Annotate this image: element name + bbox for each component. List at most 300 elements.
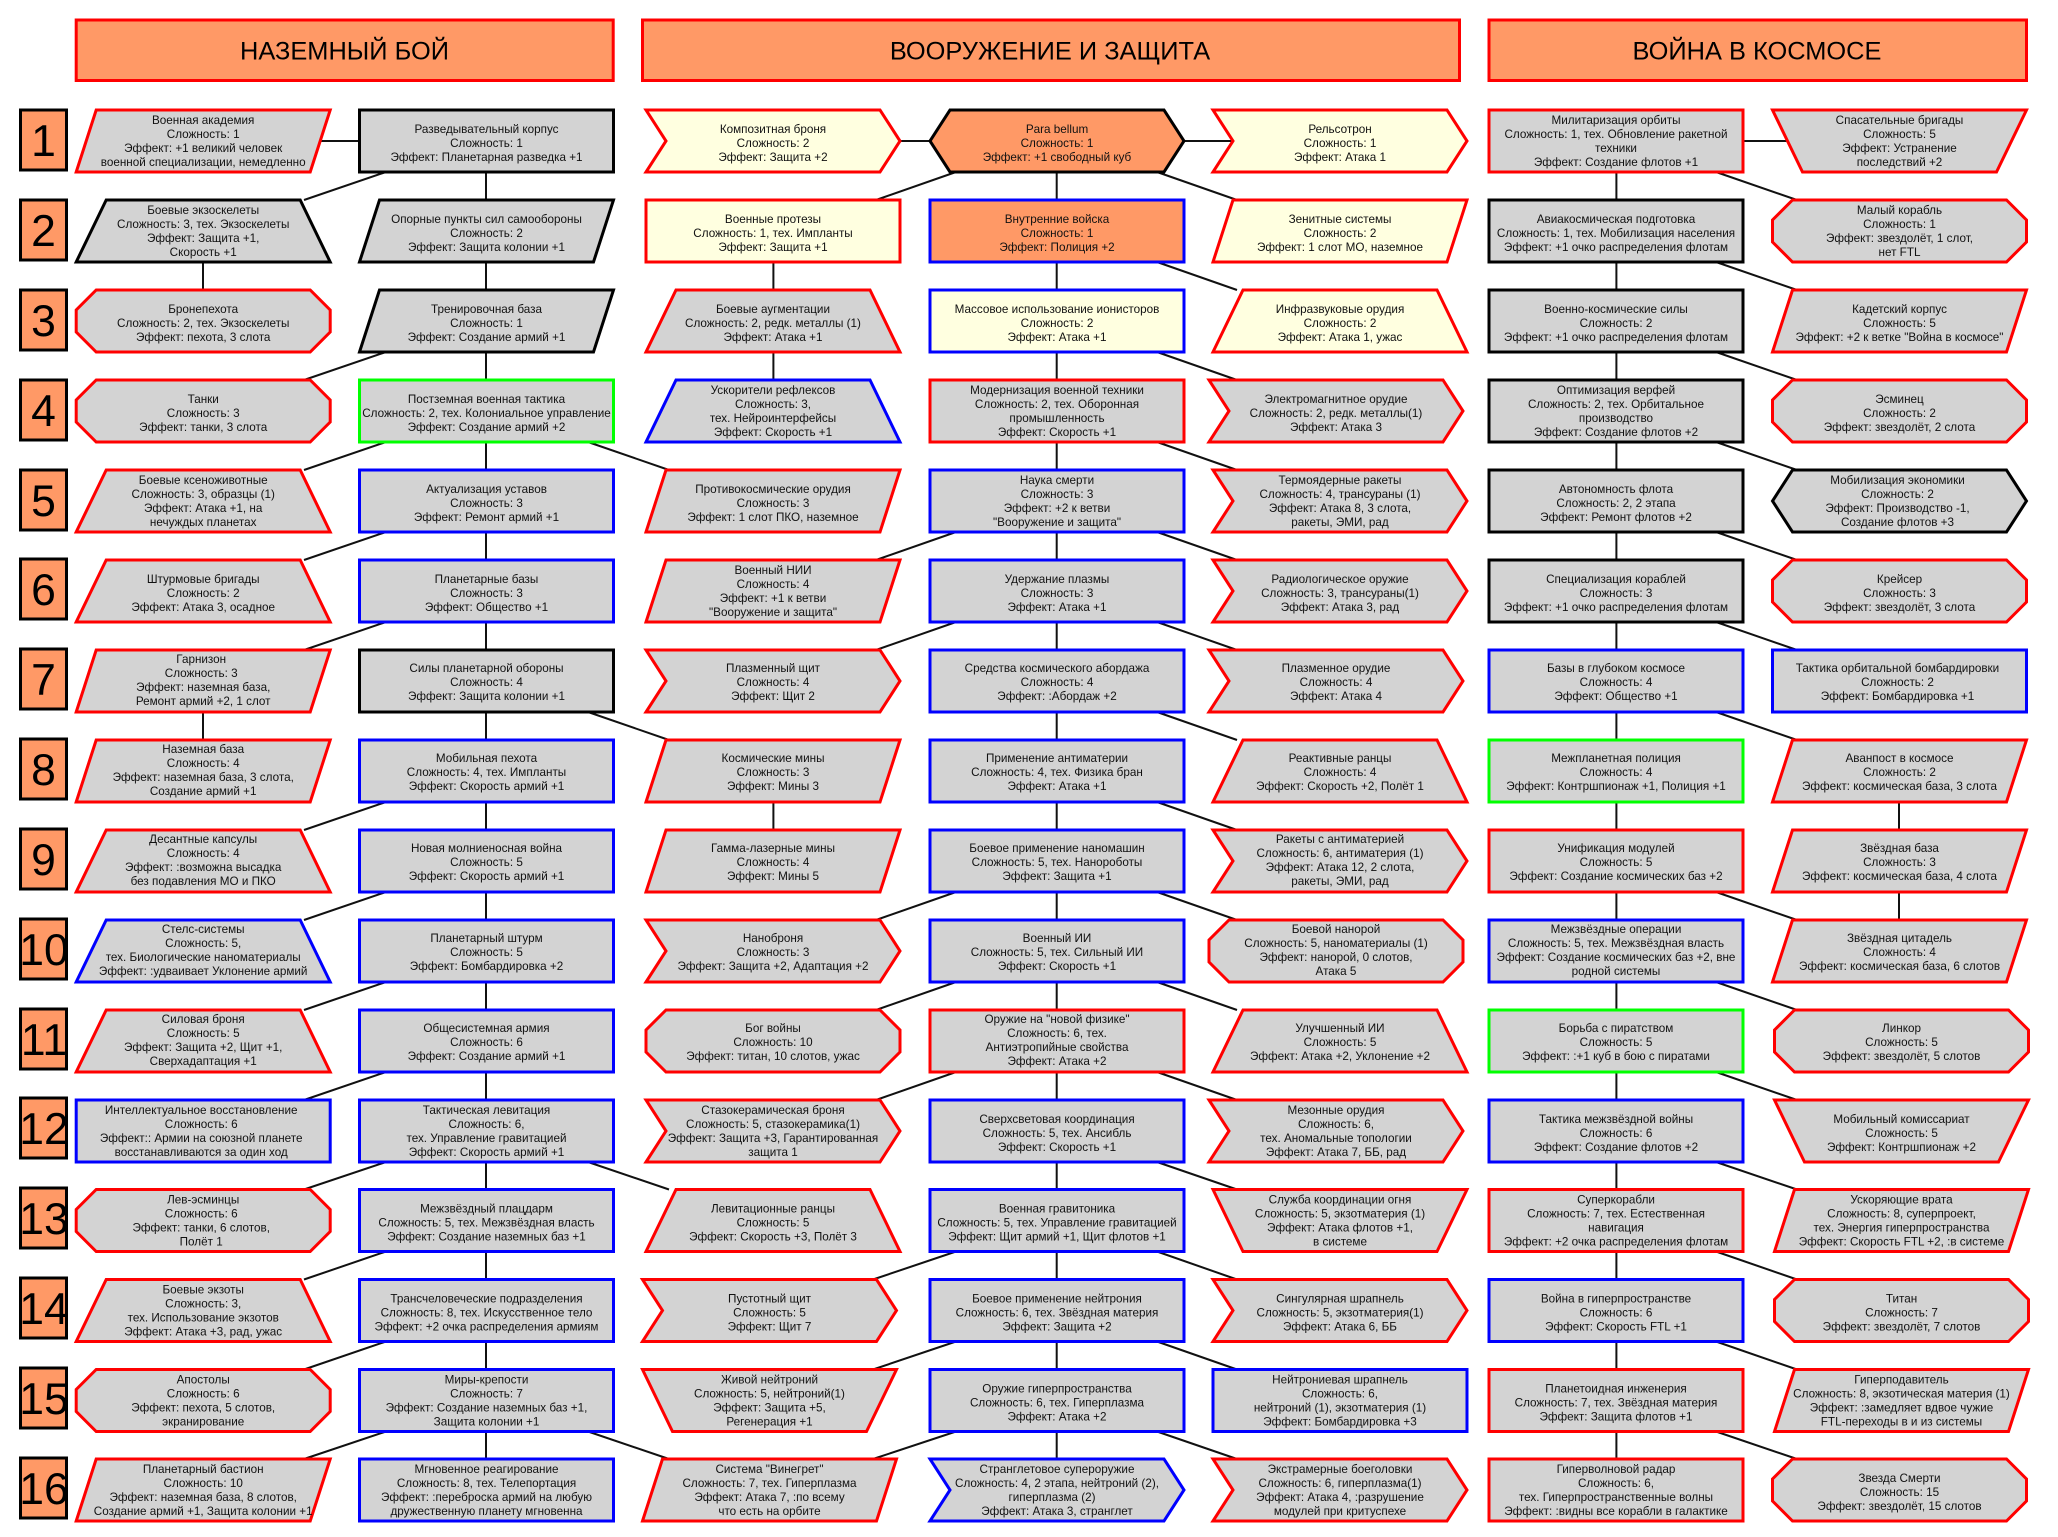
node: Интеллектуальное восстановление: восстанавливаются за один ход — [115, 1146, 288, 1159]
node: Плазменный щит: Плазменный щит — [726, 662, 821, 675]
node: Планетарный штурм — [360, 920, 614, 982]
node: Система Винегрет: Эффект: Атака 7, :по всему — [694, 1491, 845, 1504]
node: Пустотный щит: Сложность: 5 — [733, 1306, 806, 1320]
node: Электромагнитное орудие: Эффект: Атака 3 — [1290, 421, 1382, 434]
node: Мобильный комиссариат: Эффект: Контршпионаж +2 — [1827, 1141, 1976, 1154]
heading: space war: ВОЙНА В КОСМОСЕ — [1633, 36, 1881, 66]
node: Планетоидная инженерия: Эффект: Защита флотов +1 — [1540, 1410, 1692, 1424]
node: Силы планетарной обороны: Сложность: 4 — [450, 676, 523, 689]
node: Наука смерти: Эффект: +2 к ветви — [1004, 502, 1110, 515]
node: Противокосмические орудия: Противокосмические орудия — [695, 483, 851, 496]
node: Сверхсветовая координация: Сверхсветовая координация — [979, 1113, 1135, 1126]
node: Зенитные системы — [1213, 200, 1467, 262]
node: Наноброня: Сложность: 3 — [737, 946, 809, 959]
node: Модернизация военной техники: Модернизация военной техники — [970, 384, 1144, 397]
node: Мобильная пехота: Сложность: 4, тех. Импланты — [407, 766, 566, 779]
node: Борьба с пиратством — [1489, 1010, 1743, 1072]
node: Наноброня: Эффект: Защита +2, Адаптация +2 — [677, 960, 869, 973]
node: Война в гиперпространстве: Война в гиперпространстве — [1541, 1292, 1691, 1306]
node: Наноброня — [646, 920, 900, 982]
node: Эсминец — [1772, 380, 2026, 442]
node: Танки — [76, 380, 330, 442]
node: Странглетовое супероружие: Странглетовое супероружие — [980, 1463, 1134, 1476]
node: Десантные капсулы: Эффект: :возможна высадка — [125, 861, 282, 874]
node: Новая молниеносная война: Сложность: 5 — [450, 856, 523, 869]
node: Разведывательный корпус: Эффект: Планетарная разведка +1 — [390, 151, 583, 164]
node: Боевое применение нейтрония: Сложность: 6, тех. Звёздная материя — [956, 1306, 1158, 1320]
panel: space war — [1489, 20, 2028, 1521]
node: Экстрамерные боеголовки: Экстрамерные боеголовки — [1268, 1463, 1412, 1476]
node: Кадетский корпус — [1772, 290, 2026, 352]
node: Планетарные базы: Эффект: Общество +1 — [425, 601, 548, 614]
node: Тактическая левитация: Эффект: Скорость армий +1 — [409, 1146, 564, 1159]
node: Линкор: Сложность: 5 — [1865, 1036, 1938, 1049]
node: Кадетский корпус: Эффект: +2 к ветке "Война в космосе" — [1796, 331, 2003, 344]
node: Крейсер: Крейсер — [1877, 573, 1923, 586]
node: Реактивные ранцы: Сложность: 4 — [1304, 766, 1377, 779]
node: Ракеты с антиматерией: ракеты, ЭМИ, рад — [1291, 875, 1389, 888]
node: Электромагнитное орудие: Сложность: 2, редк. металлы(1) — [1250, 407, 1422, 420]
node: Боевое применение нейтрония — [930, 1280, 1184, 1342]
node: Применение антиматерии: Применение антиматерии — [986, 752, 1128, 765]
node: Планетоидная инженерия: Планетоидная инженерия — [1545, 1382, 1687, 1396]
node: Рельсотрон: Рельсотрон — [1308, 123, 1372, 136]
node: Живой нейтроний: Живой нейтроний — [721, 1374, 818, 1386]
node: Линкор: Эффект: звездолёт, 5 слотов — [1823, 1050, 1980, 1063]
node: Экстрамерные боеголовки — [1213, 1459, 1467, 1521]
node: Штурмовые бригады: Штурмовые бригады — [147, 573, 260, 586]
node: Линкор: Линкор — [1882, 1022, 1921, 1035]
node: Опорные пункты сил самообороны: Эффект: Защита колонии +1 — [408, 241, 565, 254]
node: Межзвёздный плацдарм: Межзвёздный плацдарм — [420, 1202, 553, 1216]
row number 8: 8 — [31, 746, 56, 795]
node: Разведывательный корпус — [360, 110, 614, 172]
connectors: space war — [1616, 141, 1899, 1459]
node: Электромагнитное орудие — [1209, 380, 1463, 442]
node: Силы планетарной обороны: Эффект: Защита колонии +1 — [408, 690, 565, 703]
node: Бог войны — [646, 1010, 900, 1072]
node: Лев-эсминцы — [76, 1190, 330, 1252]
node: Милитаризация орбиты — [1489, 110, 1743, 172]
node: Военно-космические силы: Сложность: 2 — [1580, 317, 1652, 330]
node: Межзвёздный плацдарм — [360, 1190, 614, 1252]
node: Композитная броня: Сложность: 2 — [737, 137, 809, 150]
node: Боевые ксеноживотные: Сложность: 3, образцы (1) — [132, 488, 275, 501]
node: Военная академия: Сложность: 1 — [167, 128, 240, 141]
node: Тренировочная база: Эффект: Создание армий +1 — [408, 331, 565, 344]
connectors: ground combat — [203, 141, 669, 1459]
node: Военный ИИ — [930, 920, 1184, 982]
node: Боевые экзоскелеты: Эффект: Защита +1, — [147, 232, 259, 245]
node: Тактическая левитация: тех. Управление гравитацией — [406, 1132, 566, 1145]
node: Военно-космические силы: Военно-космические силы — [1544, 303, 1688, 316]
node: Композитная броня: Эффект: Защита +2 — [718, 151, 828, 164]
node: Крейсер: Эффект: звездолёт, 3 слота — [1824, 601, 1976, 614]
node: Военный ИИ: Сложность: 5, тех. Сильный ИИ — [971, 946, 1143, 959]
node: Плазменное орудие: Сложность: 4 — [1300, 676, 1373, 689]
node: Боевое применение нейтрония: Боевое применение нейтрония — [972, 1292, 1142, 1306]
node: Звезда Смерти — [1772, 1459, 2026, 1521]
node: Гамма-лазерные мины — [646, 830, 900, 892]
node: Титан: Эффект: звездолёт, 7 слотов — [1823, 1320, 1980, 1334]
node: Тактика орбитальной бомбардировки: Тактика орбитальной бомбардировки — [1796, 662, 1999, 675]
node: Боевые экзоты: Эффект: Атака +3, рад, ужас — [124, 1326, 282, 1338]
node: Миры-крепости — [360, 1370, 614, 1432]
node: Ускоряющие врата: Ускоряющие врата — [1850, 1194, 1953, 1206]
node: Борьба с пиратством: Эффект: :+1 куб в бою с пиратами — [1522, 1050, 1710, 1063]
node: Удержание плазмы: Эффект: Атака +1 — [1008, 601, 1106, 614]
node: Тактика межзвёздной войны: Эффект: Создание флотов +2 — [1534, 1141, 1698, 1154]
node: Лев-эсминцы: Эффект: танки, 6 слотов, — [132, 1222, 270, 1234]
node: Планетарный штурм: Эффект: Бомбардировка +2 — [410, 960, 563, 973]
node: Военный НИИ: "Вооружение и защита" — [709, 606, 837, 619]
heading: weapons and defense — [642, 20, 1460, 80]
node: Модернизация военной техники: промышленность — [1009, 412, 1105, 425]
node: Мобильный комиссариат: Мобильный комиссариат — [1833, 1113, 1970, 1126]
node: Оптимизация верфей: Оптимизация верфей — [1557, 384, 1675, 397]
node: Звёздная цитадель: Сложность: 4 — [1863, 946, 1936, 959]
node: Живой нейтроний: Регенерация +1 — [726, 1416, 813, 1428]
node: Планетарный штурм: Планетарный штурм — [430, 932, 543, 945]
node: Автономность флота — [1489, 470, 1743, 532]
node: Гиперволновой радар: Сложность: 6, — [1578, 1477, 1654, 1490]
node: Военная академия: Эффект: +1 великий человек — [124, 142, 283, 155]
node: Удержание плазмы: Удержание плазмы — [1005, 573, 1109, 586]
node: Силовая броня — [76, 1010, 330, 1072]
node: Аванпост в космосе: Эффект: космическая база, 3 слота — [1802, 780, 1997, 793]
node: Мобильный комиссариат: Сложность: 5 — [1865, 1127, 1938, 1140]
node: Оптимизация верфей — [1489, 380, 1743, 442]
node: Средства космического абордажа: Эффект: :Абордаж +2 — [997, 690, 1117, 703]
node: Стелс-системы: Эффект: :удваивает Уклонение армий — [99, 965, 307, 978]
node: Ускорители рефлексов: тех. Нейроинтерфейсы — [710, 412, 836, 425]
node: Силовая броня: Сверхадаптация +1 — [150, 1055, 257, 1068]
node: Мобильная пехота: Мобильная пехота — [436, 752, 538, 765]
node: Милитаризация орбиты: Сложность: 1, тех. Обновление ракетной — [1504, 128, 1728, 141]
node: Боевые экзоты: Сложность: 3, — [165, 1298, 241, 1310]
node: Оружие на новой физике — [930, 1010, 1184, 1072]
node: Боевые экзоскелеты: Скорость +1 — [170, 246, 237, 259]
node: Плазменный щит — [646, 650, 900, 712]
node: Малый корабль: Сложность: 1 — [1863, 218, 1936, 231]
node: Апостолы: Сложность: 6 — [167, 1388, 240, 1400]
node: Авиакосмическая подготовка — [1489, 200, 1743, 262]
node: Левитационные ранцы: Сложность: 5 — [737, 1216, 810, 1230]
node: Новая молниеносная война — [360, 830, 614, 892]
node: Аванпост в космосе: Аванпост в космосе — [1845, 752, 1954, 765]
node: Штурмовые бригады: Эффект: Атака 3, осадное — [131, 601, 275, 614]
node: Автономность флота: Эффект: Ремонт флотов +2 — [1540, 511, 1692, 524]
node: Военные протезы — [646, 200, 900, 262]
node: Сингулярная шрапнель: Сингулярная шрапнель — [1276, 1292, 1404, 1306]
node: Внутренние войска — [930, 200, 1184, 262]
node: Военный НИИ — [646, 560, 900, 622]
node: Специализация кораблей: Эффект: +1 очко распределения флотам — [1504, 601, 1728, 614]
node: Реактивные ранцы — [1213, 740, 1467, 802]
node: Гиперподавитель: Сложность: 8, экзотическая материя (1) — [1793, 1388, 2010, 1400]
node: Актуализация уставов: Сложность: 3 — [450, 497, 523, 510]
node: Оружие на новой физике: Эффект: Атака +2 — [1008, 1055, 1106, 1068]
node: Звёздная цитадель — [1772, 920, 2026, 982]
node: Модернизация военной техники: Сложность: 2, тех. Оборонная — [975, 398, 1139, 411]
node: Суперкорабли: Суперкорабли — [1577, 1194, 1655, 1206]
node: Интеллектуальное восстановление: Сложность: 6 — [165, 1118, 238, 1131]
node: Интеллектуальное восстановление: Интеллектуальное восстановление — [105, 1104, 297, 1117]
node: Боевые аугментации: Боевые аугментации — [716, 303, 830, 316]
node: Тренировочная база: Сложность: 1 — [450, 317, 523, 330]
node: Боевое применение наномашин: Эффект: Защита +1 — [1002, 870, 1112, 883]
node: Средства космического абордажа — [930, 650, 1184, 712]
node: Малый корабль: Эффект: звездолёт, 1 слот, — [1826, 232, 1973, 245]
node: Планетарный бастион — [76, 1459, 330, 1521]
node: Служба координации огня: Эффект: Атака флотов +1, — [1267, 1222, 1413, 1234]
node: Сверхсветовая координация: Сложность: 5, тех. Ансибль — [983, 1127, 1131, 1140]
node: Массовое использование ионисторов: Сложность: 2 — [1021, 317, 1093, 330]
node: Миры-крепости: Защита колонии +1 — [434, 1416, 539, 1428]
node: Лев-эсминцы: Лев-эсминцы — [167, 1194, 239, 1206]
node: Военно-космические силы: Эффект: +1 очко распределения флотам — [1504, 331, 1728, 344]
node: Боевой нанорой: Атака 5 — [1316, 965, 1357, 978]
node: Военная академия — [76, 110, 330, 172]
node: Странглетовое супероружие: Сложность: 4, 2 этапа, нейтроний (2), — [955, 1477, 1159, 1490]
node: Ускорители рефлексов — [646, 380, 900, 442]
row number 7: 7 — [31, 656, 56, 705]
node: Плазменное орудие — [1209, 650, 1463, 712]
node: Нейтрониевая шрапнель: нейтроний (1), экзотматерия (1) — [1254, 1402, 1426, 1414]
node: Мобилизация экономики: Мобилизация экономики — [1830, 474, 1965, 487]
node: Трансчеловеческие подразделения: Сложность: 8, тех. Искусственное тело — [381, 1306, 593, 1320]
node: Наука смерти: Наука смерти — [1020, 474, 1094, 487]
node: Силовая броня: Эффект: Защита +2, Щит +1, — [124, 1041, 282, 1054]
node: Ускоряющие врата: Сложность: 8, суперпроект, — [1827, 1208, 1976, 1220]
node: Планетарный бастион: Создание армий +1, Защита колонии +1 — [94, 1505, 313, 1518]
row number 8 — [20, 739, 66, 799]
node: Опорные пункты сил самообороны: Сложность: 2 — [450, 227, 523, 240]
node: Межпланетная полиция: Сложность: 4 — [1580, 766, 1653, 779]
node: Боевые ксеноживотные: нечуждых планетах — [150, 516, 257, 529]
node: Модернизация военной техники: Эффект: Скорость +1 — [998, 426, 1116, 439]
heading: space war — [1489, 20, 2026, 80]
node: Лев-эсминцы: Полёт 1 — [180, 1236, 223, 1248]
node: Авиакосмическая подготовка: Авиакосмическая подготовка — [1537, 213, 1696, 226]
node: Нейтрониевая шрапнель: Нейтрониевая шрапнель — [1272, 1374, 1408, 1386]
node: Специализация кораблей — [1489, 560, 1743, 622]
node: Ускорители рефлексов: Сложность: 3, — [735, 398, 811, 411]
node: Космические мины: Сложность: 3 — [737, 766, 809, 779]
node: Суперкорабли: навигация — [1588, 1222, 1644, 1234]
node: Тактическая левитация: Сложность: 6, — [448, 1118, 525, 1131]
node: Левитационные ранцы: Эффект: Скорость +3, Полёт 3 — [689, 1230, 857, 1244]
node: Улучшенный ИИ — [1213, 1010, 1467, 1072]
node: Удержание плазмы: Сложность: 3 — [1021, 587, 1093, 600]
node: Оружие на новой физике: Сложность: 6, тех. — [1007, 1027, 1107, 1040]
node: Звёздная база: Эффект: космическая база, 4 слота — [1802, 870, 1997, 883]
node: Межзвёздные операции: Сложность: 5, тех. Межзвёздная власть — [1508, 937, 1724, 950]
node: Para bellum: Эффект: +1 свободный куб — [983, 151, 1132, 164]
node: Спасательные бригады: Сложность: 5 — [1863, 128, 1936, 141]
node: Гарнизон: Эффект: наземная база, — [136, 681, 270, 694]
node: Система Винегрет: Сложность: 7, тех. Гиперплазма — [682, 1477, 857, 1490]
node: Кадетский корпус: Кадетский корпус — [1852, 303, 1947, 316]
node: Оружие гиперпространства: Оружие гиперпространства — [982, 1382, 1132, 1396]
node: Бронепехота: Бронепехота — [168, 303, 239, 316]
row number 13: 13 — [19, 1195, 69, 1244]
node: Звезда Смерти: Звезда Смерти — [1858, 1472, 1941, 1485]
node: Тактика орбитальной бомбардировки: Эффект: Бомбардировка +1 — [1821, 690, 1974, 703]
node: Оружие гиперпространства: Эффект: Атака +2 — [1008, 1410, 1106, 1424]
node: Разведывательный корпус: Сложность: 1 — [450, 137, 523, 150]
node: Стазокерамическая броня: защита 1 — [748, 1146, 798, 1159]
node: Гарнизон: Сложность: 3 — [165, 667, 238, 680]
row number 6 — [20, 559, 66, 619]
node: Мобилизация экономики — [1772, 470, 2026, 532]
node: Гарнизон: Гарнизон — [176, 653, 226, 666]
row number 5 — [20, 470, 66, 530]
node: Космические мины — [646, 740, 900, 802]
node: Сингулярная шрапнель: Сложность: 5, экзотматерия(1) — [1257, 1306, 1424, 1320]
node: Мезонные орудия: Эффект: Атака 7, ББ, рад — [1266, 1146, 1406, 1159]
node: Наземная база — [76, 740, 330, 802]
node: Ускоряющие врата: тех. Энергия гиперпространства — [1814, 1222, 1990, 1234]
node: Мгновенное реагирование: дружественную планету мгновенна — [390, 1505, 583, 1518]
node: Ракеты с антиматерией: Сложность: 6, антиматерия (1) — [1256, 847, 1424, 860]
row number 3 — [20, 290, 66, 350]
node: Базы в глубоком космосе: Эффект: Общество +1 — [1554, 690, 1678, 703]
node: Гамма-лазерные мины: Сложность: 4 — [737, 856, 810, 869]
node: Радиологическое оружие: Сложность: 3, трансураны(1) — [1261, 587, 1419, 600]
node: Оптимизация верфей: Эффект: Создание флотов +2 — [1534, 426, 1698, 439]
node: Боевые аугментации — [646, 290, 900, 352]
node: Крейсер: Сложность: 3 — [1863, 587, 1936, 600]
node: Улучшенный ИИ: Эффект: Атака +2, Уклонение +2 — [1250, 1050, 1430, 1063]
node: Военные протезы: Эффект: Защита +1 — [718, 241, 828, 254]
node: Космические мины: Космические мины — [722, 752, 824, 765]
node: Гиперподавитель: Гиперподавитель — [1854, 1374, 1949, 1386]
node: Зенитные системы: Эффект: 1 слот МО, наземное — [1257, 241, 1423, 254]
node: Оптимизация верфей: Сложность: 2, тех. Орбитальное — [1528, 398, 1704, 411]
node: Война в гиперпространстве: Эффект: Скорость FTL +1 — [1545, 1320, 1687, 1334]
node: Бог войны: Бог войны — [745, 1022, 801, 1035]
row number 12: 12 — [19, 1105, 69, 1154]
node: Лев-эсминцы: Сложность: 6 — [165, 1208, 238, 1220]
node: Стазокерамическая броня: Эффект: Защита +3, Гарантированная — [668, 1132, 878, 1145]
node: Боевой нанорой: Боевой нанорой — [1292, 923, 1380, 936]
node: Межзвёздные операции: Эффект: Создание космических баз +2, вне — [1497, 951, 1735, 964]
node: Левитационные ранцы: Левитационные ранцы — [711, 1202, 835, 1216]
node: Планетарные базы: Планетарные базы — [435, 573, 538, 586]
node: Миры-крепости: Эффект: Создание наземных баз +1, — [386, 1402, 587, 1414]
node: Мобилизация экономики: Эффект: Производство -1, — [1825, 502, 1970, 515]
node: Композитная броня: Композитная броня — [720, 123, 826, 136]
node: Титан: Титан — [1886, 1292, 1917, 1306]
node: Звёздная база: Звёздная база — [1860, 842, 1939, 855]
node: Боевые ксеноживотные: Эффект: Атака +1, на — [144, 502, 263, 515]
node: Унификация модулей — [1489, 830, 1743, 892]
node: Суперкорабли: Эффект: +2 очка распределения флотам — [1504, 1236, 1728, 1248]
row number 15: 15 — [19, 1375, 69, 1424]
node: Боевые экзоты: Боевые экзоты — [162, 1284, 244, 1296]
node: Мгновенное реагирование: Мгновенное реагирование — [414, 1463, 559, 1476]
node: Инфразвуковые орудия: Инфразвуковые орудия — [1276, 303, 1404, 316]
node: Массовое использование ионисторов: Массовое использование ионисторов — [955, 303, 1159, 316]
node: Мобильный комиссариат — [1774, 1100, 2028, 1162]
node: Оружие гиперпространства — [930, 1370, 1184, 1432]
node: Эсминец: Эсминец — [1875, 393, 1924, 406]
node: Эсминец: Сложность: 2 — [1863, 407, 1936, 420]
node: Опорные пункты сил самообороны: Опорные пункты сил самообороны — [391, 213, 582, 226]
node: Базы в глубоком космосе: Сложность: 4 — [1580, 676, 1653, 689]
row number 10: 10 — [19, 926, 69, 975]
node: Рельсотрон: Эффект: Атака 1 — [1294, 151, 1386, 164]
node: Боевое применение наномашин: Боевое применение наномашин — [969, 842, 1145, 855]
node: Служба координации огня: в системе — [1313, 1236, 1367, 1248]
node: Планетоидная инженерия — [1489, 1370, 1743, 1432]
node: Бронепехота: Сложность: 2, тех. Экзоскелеты — [117, 317, 289, 330]
node: Тактическая левитация — [360, 1100, 614, 1162]
node: Наземная база: Наземная база — [162, 743, 245, 756]
node: Гиперподавитель: FTL-переходы в и из системы — [1821, 1416, 1982, 1428]
node: Реактивные ранцы: Реактивные ранцы — [1289, 752, 1391, 765]
row number 11: 11 — [21, 1016, 67, 1065]
node: Наука смерти: "Вооружение и защита" — [993, 516, 1121, 529]
node: Война в гиперпространстве: Сложность: 6 — [1580, 1306, 1652, 1320]
node: Миры-крепости: Сложность: 7 — [450, 1388, 523, 1400]
node: Система Винегрет: Система "Винегрет" — [715, 1463, 824, 1476]
node: Военно-космические силы — [1489, 290, 1743, 352]
node: Унификация модулей: Сложность: 5 — [1580, 856, 1653, 869]
node: Плазменное орудие: Эффект: Атака 4 — [1290, 690, 1383, 703]
node: Реактивные ранцы: Эффект: Скорость +2, Полёт 1 — [1256, 780, 1424, 793]
node: Живой нейтроний: Сложность: 5, нейтроний(1) — [694, 1388, 845, 1400]
node: Странглетовое супероружие: Эффект: Атака 3, странглет — [981, 1505, 1133, 1518]
node: Гамма-лазерные мины: Гамма-лазерные мины — [711, 842, 835, 855]
node: Межзвёздный плацдарм: Эффект: Создание наземных баз +1 — [387, 1230, 586, 1244]
node: Милитаризация орбиты: Эффект: Создание флотов +1 — [1534, 156, 1698, 169]
node: Эсминец: Эффект: звездолёт, 2 слота — [1824, 421, 1976, 434]
node: Стелс-системы: Стелс-системы — [162, 923, 245, 936]
node: Силовая броня: Силовая броня — [162, 1013, 245, 1026]
node: Межпланетная полиция: Межпланетная полиция — [1551, 752, 1681, 765]
node: Штурмовые бригады: Сложность: 2 — [167, 587, 240, 600]
node: Радиологическое оружие: Радиологическое оружие — [1271, 573, 1409, 586]
node: Зенитные системы: Сложность: 2 — [1304, 227, 1376, 240]
node: Тактическая левитация: Тактическая левитация — [423, 1104, 550, 1117]
node: Звезда Смерти: Эффект: звездолёт, 15 слотов — [1817, 1500, 1982, 1513]
node: Звёздная база: Сложность: 3 — [1863, 856, 1936, 869]
node: Тактика межзвёздной войны — [1489, 1100, 1743, 1162]
node: Гиперволновой радар: Эффект: :видны все корабли в галактике — [1504, 1505, 1728, 1518]
node: Постземная военная тактика — [360, 380, 614, 442]
node: Плазменное орудие: Плазменное орудие — [1282, 662, 1390, 675]
node: Военная гравитоника — [930, 1190, 1184, 1252]
node: Экстрамерные боеголовки: Эффект: Атака 4, :разрушение — [1256, 1491, 1424, 1504]
node: Штурмовые бригады — [76, 560, 330, 622]
node: Наземная база: Сложность: 4 — [167, 757, 240, 770]
row number 2 — [20, 200, 66, 260]
node: Военная академия: военной специализации, немедленно — [101, 156, 306, 169]
node: Межзвёздные операции — [1489, 920, 1743, 982]
node: Силы планетарной обороны: Силы планетарной обороны — [409, 662, 564, 675]
row number 4 — [20, 380, 66, 440]
node: Межпланетная полиция — [1489, 740, 1743, 802]
node: Ракеты с антиматерией: Ракеты с антиматерией — [1276, 833, 1404, 846]
node: Крейсер — [1772, 560, 2026, 622]
node: Военная гравитоника: Сложность: 5, тех. Управление гравитацией — [937, 1216, 1177, 1230]
node: Боевые ксеноживотные — [76, 470, 330, 532]
row number 14: 14 — [19, 1285, 69, 1334]
node: Система Винегрет — [642, 1459, 896, 1521]
node: Плазменный щит: Сложность: 4 — [737, 676, 810, 689]
